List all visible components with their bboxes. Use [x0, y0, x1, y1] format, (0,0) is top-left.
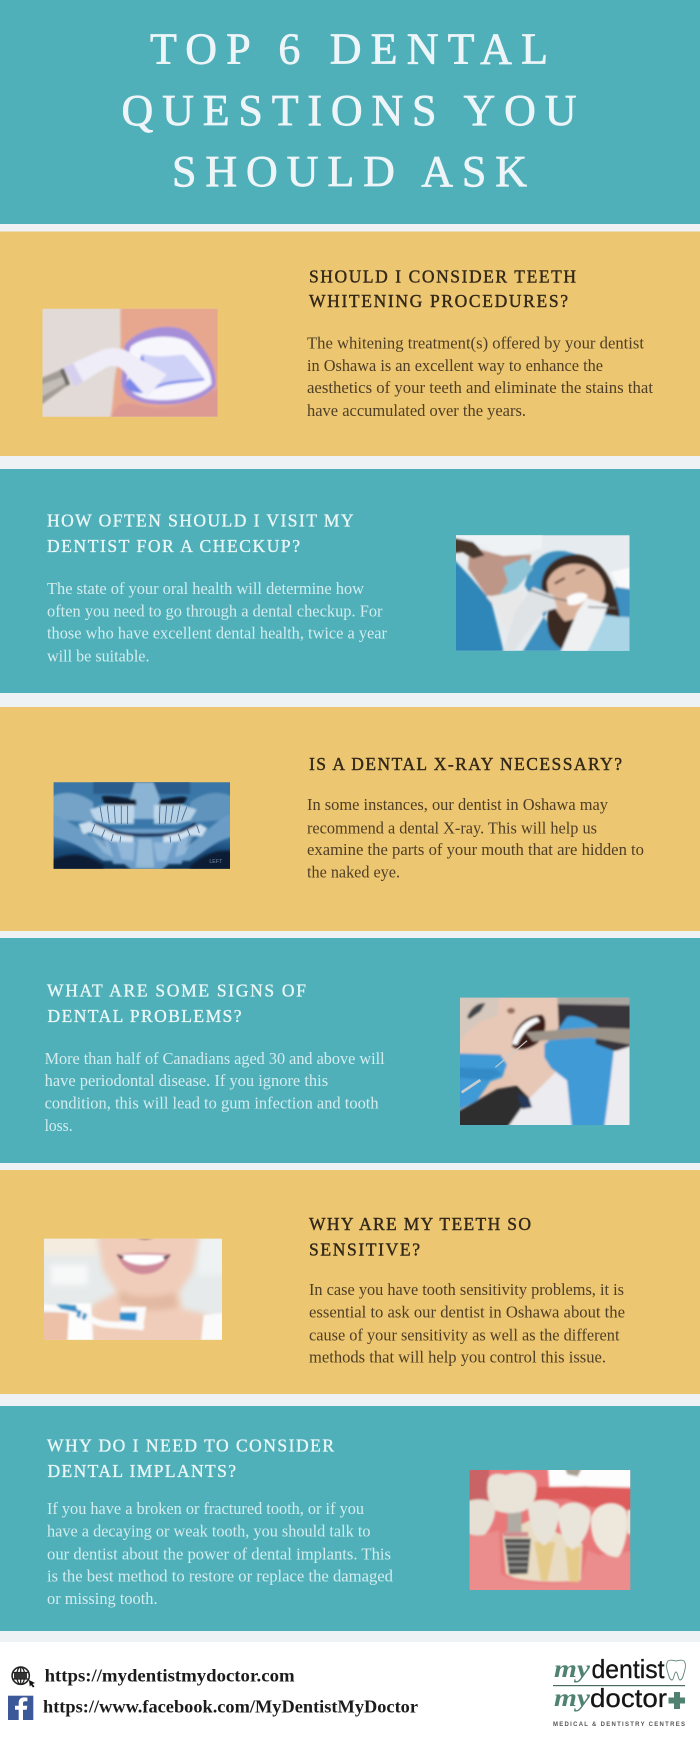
panel: header: [0, 0, 700, 224]
photo: panoramic dental x-ray: LEFT: [209, 859, 223, 865]
photo: panoramic dental x-ray: [54, 782, 230, 869]
text: x-ray: recommend a dental X-ray. This will help us: [307, 818, 597, 837]
heading: sensitive teeth: WHY ARE MY TEETH SO: [309, 1214, 531, 1234]
photo: dental treatment with blue gloves: [460, 998, 630, 1125]
photo: smiling woman with toothbrush: [44, 1238, 222, 1340]
heading: checkup: DENTIST FOR A CHECKUP?: [47, 536, 300, 556]
text: checkup: will be suitable.: [47, 646, 150, 665]
panel: checkup: [0, 469, 700, 693]
title: QUESTIONS YOU: [122, 86, 576, 135]
text: dental problems: More than half of Canadians aged 30 and above will: [45, 1049, 385, 1068]
text: checkup: [47, 579, 388, 665]
text: teeth whitening: in Oshawa is an excellent way to enhance the: [307, 356, 603, 375]
heading: dental problems: [47, 981, 306, 1026]
website link: https://mydentistmydoctor.com: [45, 1666, 295, 1686]
heading: dental implants: WHY DO I NEED TO CONSIDER: [47, 1436, 334, 1456]
panel: teeth whitening: [0, 232, 700, 456]
logo: my dentist my doctor: my: [554, 1656, 591, 1683]
text: sensitive teeth: cause of your sensitivity as well as the different: [309, 1325, 620, 1344]
icon: medical plus: [668, 1692, 685, 1709]
text: dental implants: our dentist about the power of dental implants. This: [47, 1544, 391, 1563]
icon: globe with cursor: [12, 1667, 35, 1688]
text: x-ray: In some instances, our dentist in Oshawa may: [307, 795, 609, 814]
text: teeth whitening: The whitening treatment(s) offered by your dentist: [307, 333, 644, 352]
heading: dental implants: [47, 1436, 334, 1481]
title: SHOULD ASK: [172, 147, 527, 196]
logo: my dentist my doctor: my: [554, 1685, 591, 1712]
text: dental implants: have a decaying or weak tooth, you should talk to: [47, 1522, 370, 1541]
panel: footer: [0, 1642, 700, 1750]
panel: dental problems: [0, 938, 700, 1163]
photo: dental implant model: [470, 1470, 630, 1590]
text: sensitive teeth: essential to ask our dentist in Oshawa about the: [309, 1303, 625, 1322]
heading: checkup: HOW OFTEN SHOULD I VISIT MY: [47, 511, 354, 531]
facebook link: https://www.facebook.com/MyDentistMyDoctor: [43, 1697, 418, 1717]
text: dental implants: is the best method to restore or replace the damaged: [47, 1566, 394, 1585]
text: checkup: The state of your oral health will determine how: [47, 579, 364, 598]
logo: my dentist my doctor: doctor: [590, 1683, 667, 1713]
title: [122, 24, 576, 196]
panel: sensitive teeth: [0, 1170, 700, 1394]
text: dental implants: If you have a broken or fractured tooth, or if you: [47, 1499, 364, 1518]
title: TOP 6 DENTAL: [150, 24, 548, 74]
heading: dental implants: DENTAL IMPLANTS?: [48, 1461, 236, 1481]
text: dental implants: [47, 1499, 394, 1608]
photo: dentist examining patient: [456, 535, 630, 651]
heading: teeth whitening: [309, 266, 576, 311]
heading: dental problems: DENTAL PROBLEMS?: [48, 1006, 242, 1026]
text: dental implants: or missing tooth.: [47, 1589, 158, 1608]
text: sensitive teeth: [309, 1280, 625, 1366]
heading: x-ray: IS A DENTAL X-RAY NECESSARY?: [309, 754, 622, 774]
icon: facebook: [8, 1696, 33, 1720]
text: checkup: often you need to go through a dental checkup. For: [47, 602, 383, 621]
text: teeth whitening: have accumulated over the years.: [307, 401, 526, 420]
heading: checkup: [47, 511, 354, 556]
heading: teeth whitening: WHITENING PROCEDURES?: [309, 291, 568, 311]
text: sensitive teeth: In case you have tooth sensitivity problems, it is: [309, 1280, 624, 1299]
text: x-ray: the naked eye.: [307, 863, 400, 882]
logo: my dentist my doctor: dentist: [592, 1654, 665, 1684]
logo: my dentist my doctor: MEDICAL & DENTISTRY CENTRES: [553, 1722, 685, 1728]
logo: my dentist my doctor: [553, 1654, 685, 1728]
photo: whitening light in mouth: [42, 308, 218, 417]
text: x-ray: [307, 795, 644, 882]
icon: tooth outline: [667, 1660, 685, 1680]
panel: x-ray: [0, 707, 700, 931]
text: sensitive teeth: methods that will help you control this issue.: [309, 1347, 606, 1366]
panel: dental implants: [0, 1406, 700, 1631]
text: checkup: those who have excellent dental health, twice a year: [47, 624, 388, 643]
text: dental problems: [45, 1049, 385, 1135]
text: teeth whitening: [307, 333, 653, 420]
heading: sensitive teeth: SENSITIVE?: [309, 1239, 420, 1259]
heading: sensitive teeth: [309, 1214, 531, 1259]
heading: teeth whitening: SHOULD I CONSIDER TEETH: [309, 266, 576, 286]
text: dental problems: have periodontal disease. If you ignore this: [45, 1071, 328, 1090]
heading: dental problems: WHAT ARE SOME SIGNS OF: [47, 981, 306, 1001]
text: dental problems: loss.: [45, 1116, 73, 1135]
text: teeth whitening: aesthetics of your teeth and eliminate the stains that: [307, 378, 653, 397]
text: x-ray: examine the parts of your mouth that are hidden to: [307, 840, 644, 859]
text: dental problems: condition, this will lead to gum infection and tooth: [45, 1094, 379, 1113]
